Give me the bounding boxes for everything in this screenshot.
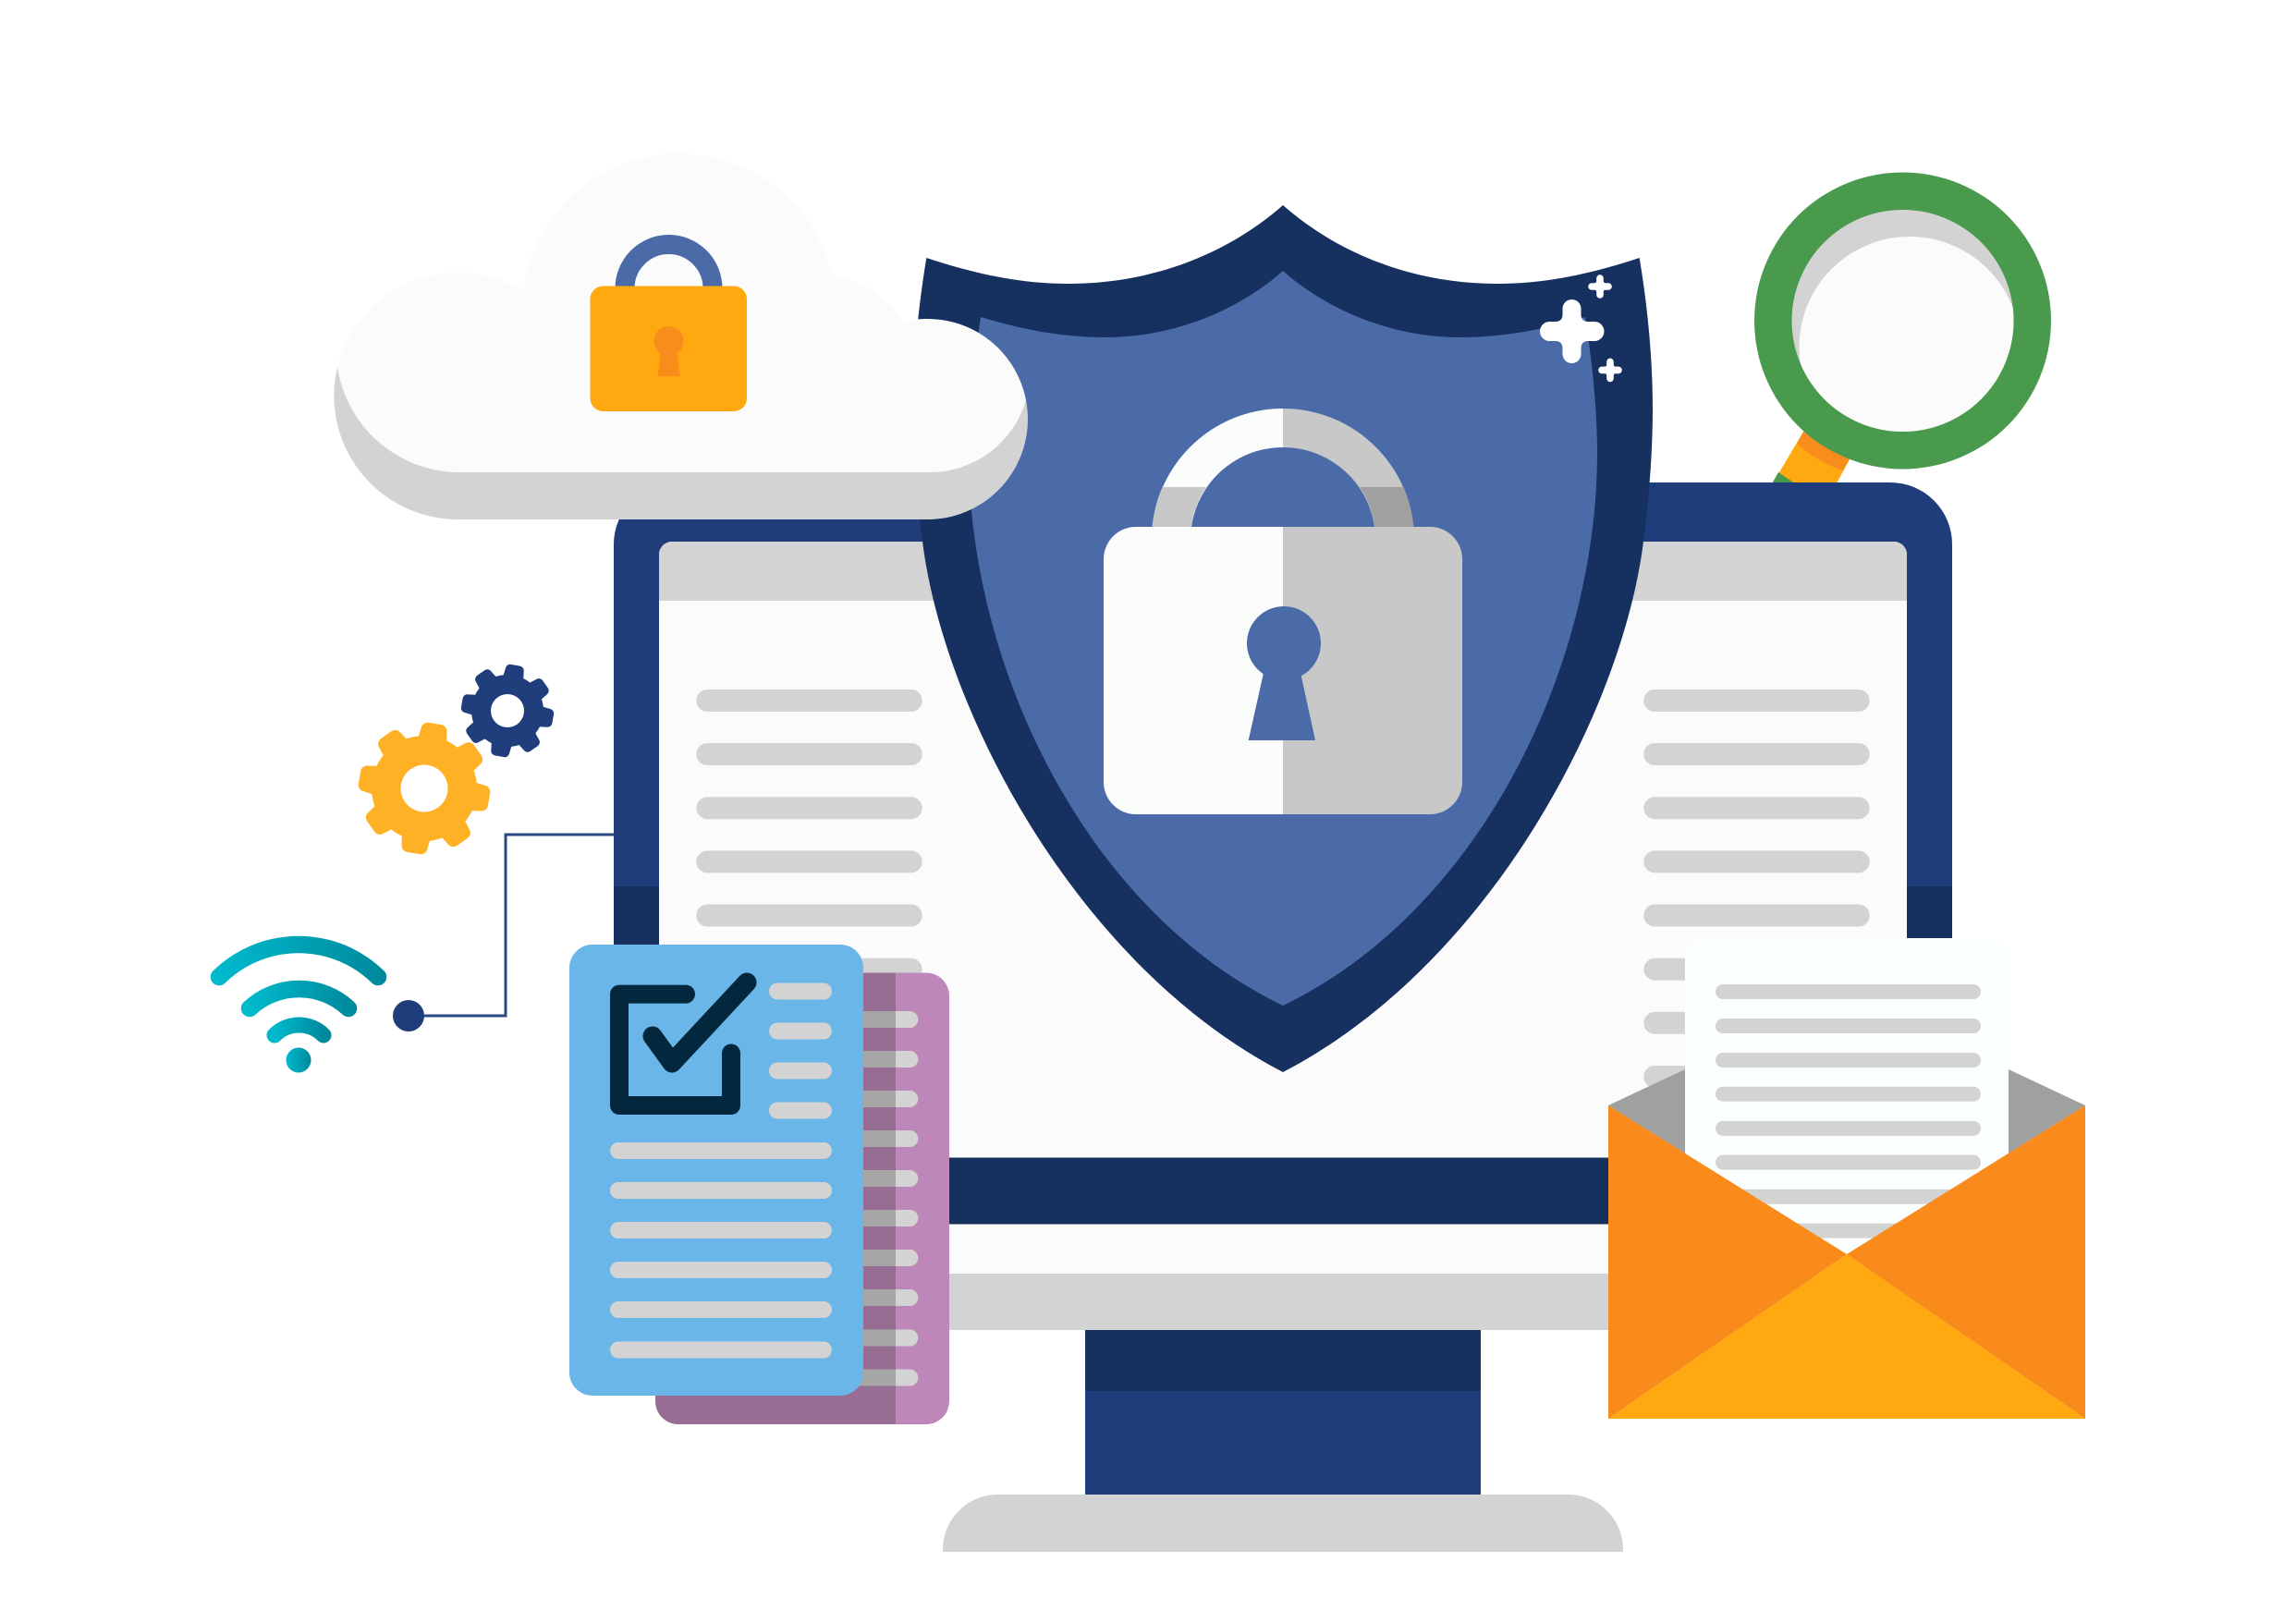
icon: magnifier handle xyxy=(1761,432,1850,504)
icon: checkbox xyxy=(619,982,747,1105)
icon: envelope back flap xyxy=(1608,1069,2085,1254)
monitor body xyxy=(614,482,1952,1330)
icon: magnifier lens xyxy=(1754,172,2051,470)
screen text lines: right column xyxy=(1643,689,1870,1088)
connector line xyxy=(409,835,614,1016)
panel: purple document xyxy=(655,972,949,1424)
shield xyxy=(913,205,1653,1072)
monitor screen xyxy=(659,542,1907,1157)
icon: shield padlock xyxy=(1104,409,1462,814)
icon: orange gear xyxy=(356,720,493,857)
connector node xyxy=(393,1000,424,1031)
screen text lines: left column xyxy=(696,689,922,981)
checklist lines xyxy=(610,983,832,1359)
icon: navy gear xyxy=(459,663,556,759)
icon: envelope front xyxy=(1608,1105,2085,1419)
cloud xyxy=(334,153,1028,519)
icon: sparkles xyxy=(1540,275,1622,382)
purple document lines xyxy=(832,1011,918,1386)
monitor stand xyxy=(943,1330,1623,1552)
illustration: cyber security scene xyxy=(211,172,2085,1552)
icon: cloud padlock xyxy=(590,245,747,411)
panel: blue checklist document xyxy=(569,945,863,1396)
panel: letter in envelope xyxy=(1685,938,2009,1257)
icon: wifi xyxy=(219,945,378,1072)
